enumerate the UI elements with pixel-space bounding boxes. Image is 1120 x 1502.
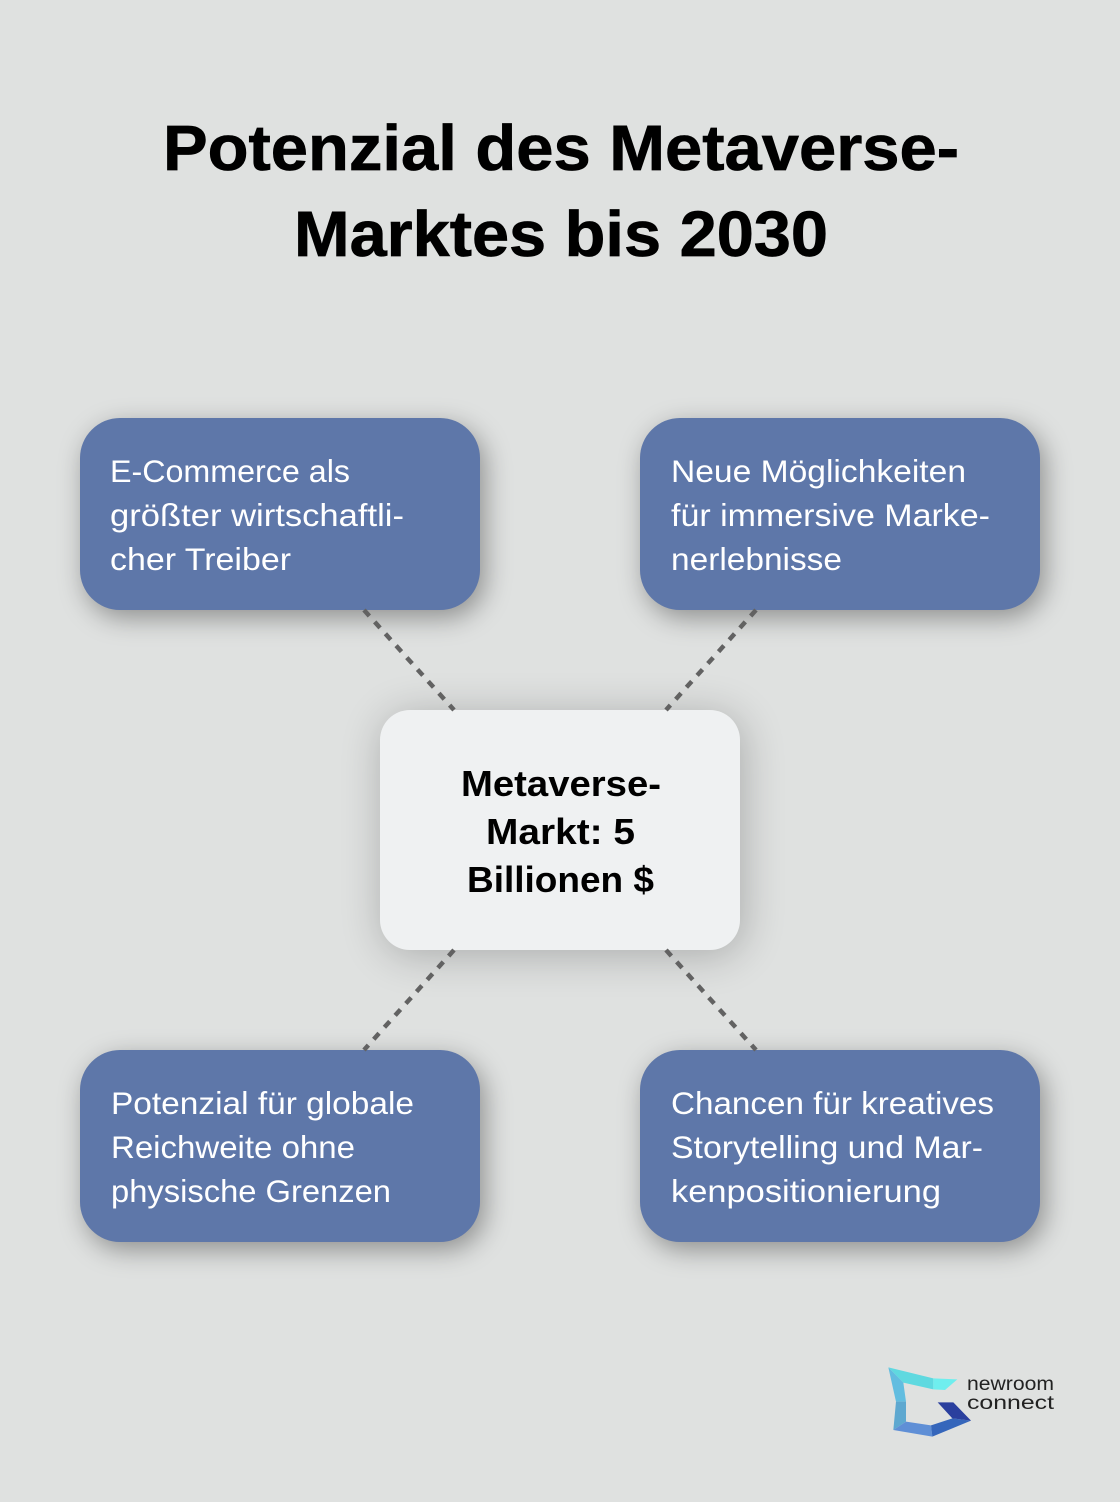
panel: storytelling: Storytelling und Mar-	[671, 1129, 983, 1165]
panel: globale reichweite: physische Grenzen	[111, 1173, 391, 1209]
panel: globale reichweite: Potenzial für globale	[111, 1085, 414, 1121]
panel: center market value	[380, 710, 740, 950]
panel: storytelling: kenpositionierung	[671, 1173, 941, 1209]
panel: e-commerce	[80, 418, 480, 610]
panel: storytelling: Chancen für kreatives	[671, 1085, 994, 1121]
panel: markenerlebnisse	[640, 418, 1040, 610]
title: Potenzial des Metaverse-	[163, 112, 959, 184]
logo: newroom connect	[888, 1367, 1055, 1437]
title: Marktes bis 2030	[294, 198, 828, 270]
title	[163, 112, 959, 270]
logo: newroom connect: newroom	[967, 1374, 1054, 1395]
panel: globale reichweite	[80, 1050, 480, 1242]
panel: e-commerce: E-Commerce als	[110, 453, 350, 489]
panel: globale reichweite: Reichweite ohne	[111, 1129, 355, 1165]
panel: markenerlebnisse: nerlebnisse	[671, 541, 842, 577]
panel: e-commerce: cher Treiber	[110, 541, 291, 577]
panel: center market value: Billionen $	[467, 859, 654, 900]
panel: center market value: Markt: 5	[486, 811, 635, 852]
panel: center market value: Metaverse-	[461, 763, 661, 804]
panel: markenerlebnisse: für immersive Marke-	[671, 497, 990, 533]
panel: e-commerce: größter wirtschaftli-	[110, 497, 404, 533]
logo: newroom connect: connect	[967, 1393, 1055, 1414]
panel: markenerlebnisse: Neue Möglichkeiten	[671, 453, 966, 489]
panel: storytelling	[640, 1050, 1040, 1242]
